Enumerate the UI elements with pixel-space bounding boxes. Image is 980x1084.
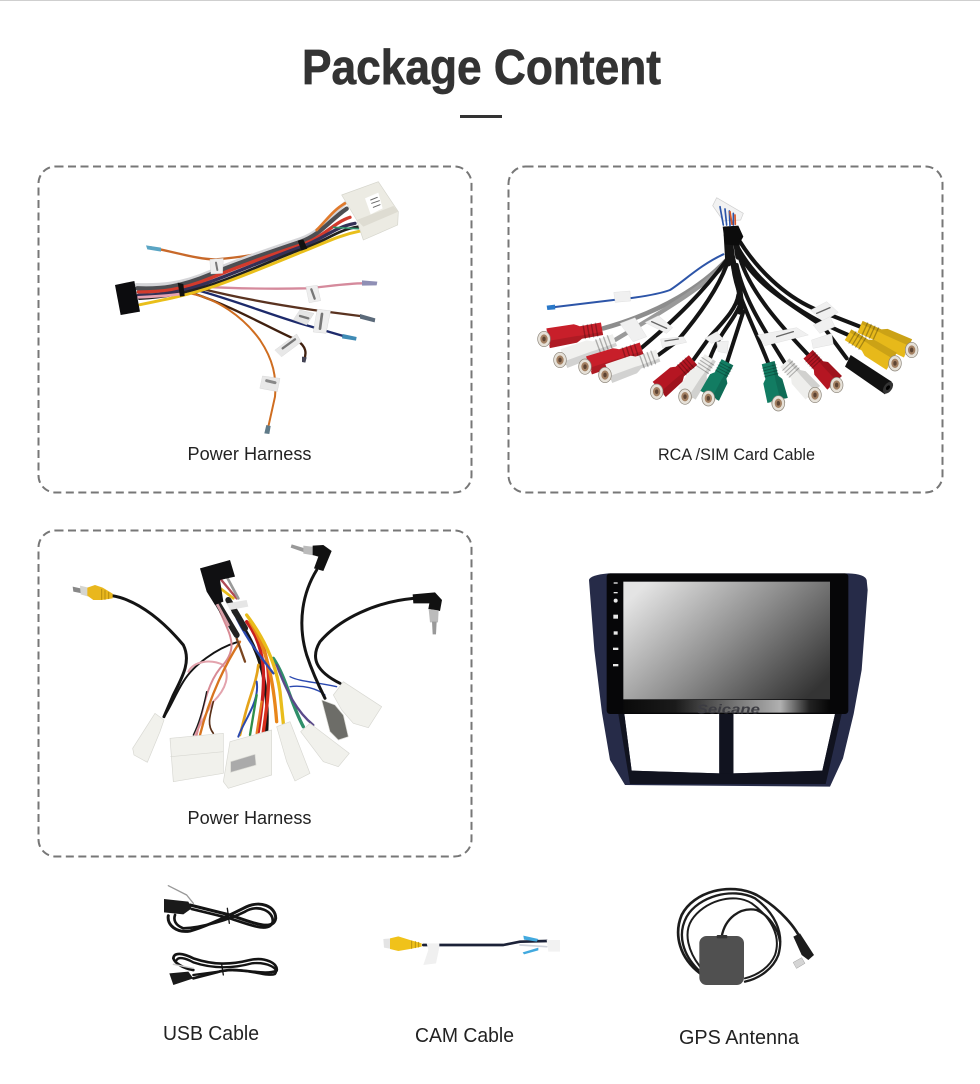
illustration: RCA cable with colored plugs bbox=[538, 198, 918, 411]
label: GPS Antenna: GPS Antenna bbox=[679, 1027, 800, 1049]
reflection band bbox=[623, 700, 830, 713]
label: Power Harness: Power Harness bbox=[188, 444, 312, 464]
USB cables bbox=[163, 886, 277, 1045]
display bbox=[623, 582, 830, 699]
title: Package Content bbox=[302, 41, 661, 95]
head unit bbox=[589, 573, 868, 787]
antenna plug 1 bbox=[291, 544, 332, 698]
label: Power Harness: Power Harness bbox=[188, 808, 312, 828]
illustration: power harness with connectors bbox=[115, 182, 398, 434]
CAM cable bbox=[383, 936, 560, 1047]
camera RCA plug bbox=[73, 585, 113, 600]
inner dark frame bbox=[618, 714, 842, 784]
GPS antenna bbox=[678, 889, 814, 1049]
dash frame bbox=[589, 573, 868, 787]
side buttons bbox=[613, 582, 618, 666]
antenna plug 2 bbox=[315, 592, 442, 683]
label: RCA /SIM Card Cable: RCA /SIM Card Cable bbox=[658, 445, 815, 464]
cable tags bbox=[614, 291, 838, 353]
center bar bbox=[719, 714, 733, 773]
label: USB Cable: USB Cable bbox=[163, 1023, 259, 1045]
brand watermark: Seicane bbox=[697, 702, 761, 717]
panel: power harness 2 bbox=[38, 530, 472, 856]
label: CAM Cable: CAM Cable bbox=[415, 1025, 514, 1047]
connectors bbox=[133, 682, 382, 788]
plugs bbox=[538, 318, 918, 411]
panel: power harness 1 bbox=[38, 166, 472, 492]
illustration: harness with antenna adapters and camera plug bbox=[73, 544, 442, 788]
panel: RCA / SIM card cable bbox=[508, 166, 942, 492]
screen bezel bbox=[607, 573, 848, 714]
title underline bbox=[460, 115, 502, 118]
